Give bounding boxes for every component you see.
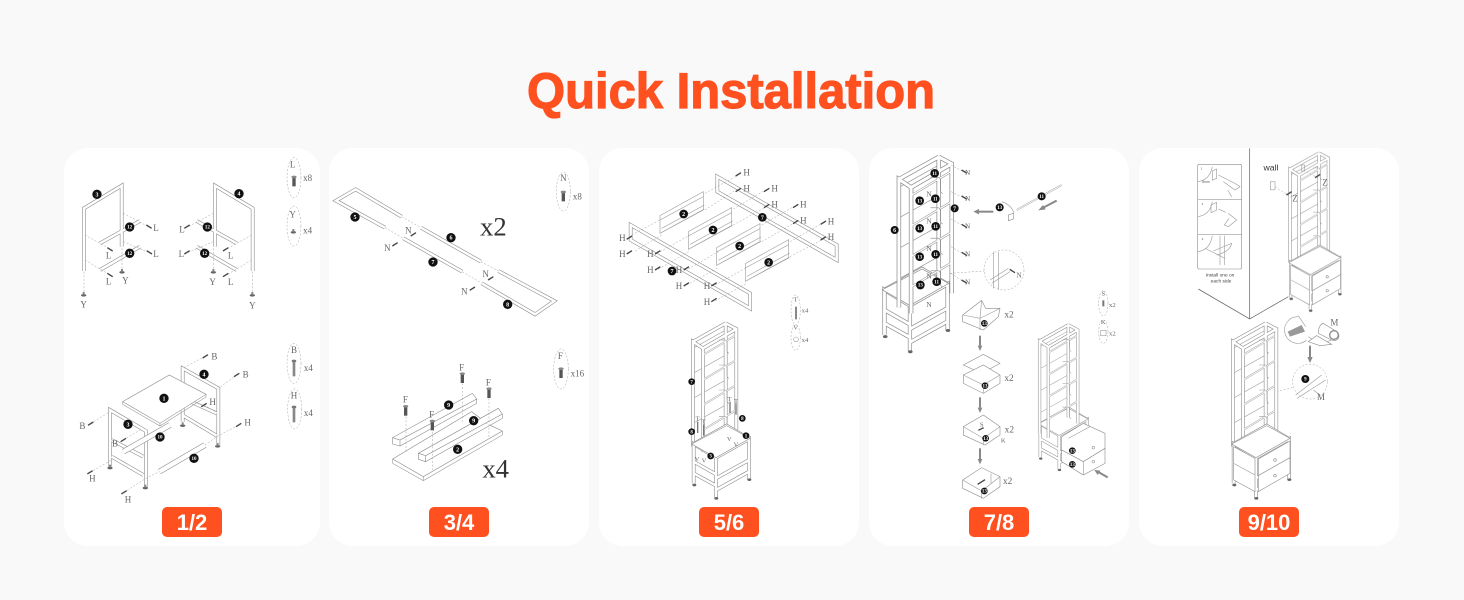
hardware ovals: S K	[1099, 291, 1116, 343]
diagram: side frames with rails and feet: L	[106, 276, 111, 286]
diagram: fabric box folding steps	[963, 300, 1014, 498]
diagram: tower fixed to wall	[1270, 153, 1342, 312]
hardware ovals: T V: V	[793, 324, 798, 331]
diagram: fabric box folding steps: x2	[1003, 477, 1013, 487]
diagram: tower with fabric bins and side rods: 11	[933, 253, 939, 258]
hardware ovals: T V	[791, 295, 809, 350]
diagram: tower with fabric bins and side rods: 13	[918, 284, 923, 289]
diagram: fabric box folding steps: x2	[1004, 310, 1014, 320]
diagram: finished tower with drawers sliding in: 13	[1070, 463, 1075, 468]
diagram: table base assembly: 10	[158, 436, 163, 441]
diagram: tower on base: 8	[741, 417, 744, 422]
diagram: fabric box folding steps: K	[1001, 437, 1006, 444]
hardware ovals: T V: x4	[802, 308, 809, 315]
instruction box: wall anchor steps: Install one on	[1206, 273, 1235, 279]
hardware ovals: L Y B H: x4	[303, 225, 313, 235]
hardware ovals: T V: x4	[802, 337, 809, 344]
diagram: long frame x2: x2	[480, 211, 507, 241]
diagram: anti-tip strap roll and detail: M	[1330, 317, 1338, 327]
diagram: tower with fabric bins and side rods: N	[965, 250, 971, 259]
step badge: 3/4	[444, 510, 475, 535]
diagram: side frames with rails and feet: L	[153, 249, 159, 259]
diagram: tower with fabric bins and side rods: 11	[932, 172, 938, 177]
hardware ovals: L Y B H: x8	[303, 173, 313, 183]
diagram: tower on base: 7	[690, 380, 693, 385]
diagram: tower with fabric bins and side rods: 6	[893, 228, 896, 234]
diagram: tower on base	[688, 323, 751, 500]
diagram: shelf board with battens x4: F	[429, 410, 434, 420]
diagram: side frames with rails and feet: L	[228, 250, 233, 260]
diagram: fabric box folding steps: 13	[983, 384, 988, 389]
diagram: long frame x2: 5	[353, 215, 356, 221]
diagram: long frame x2: N	[482, 269, 489, 279]
diagram: shelf board with battens x4: F	[459, 362, 464, 372]
diagram: shelf board with battens x4	[393, 362, 509, 483]
diagram: tower on base: T	[702, 419, 706, 426]
diagram: side frames with rails and feet: L	[153, 223, 159, 233]
diagram: tower with fabric bins and side rods: N	[965, 194, 971, 203]
panel background	[64, 148, 320, 546]
detail: rod, corner piece and arrows: 11	[1039, 195, 1045, 200]
diagram: anti-tip strap roll and detail: 9	[1304, 378, 1307, 383]
diagram: shelf board with battens x4: x4	[482, 453, 509, 483]
diagram: side frames with rails and feet: 4	[237, 192, 240, 198]
diagram: side frames with rails and feet: 12	[205, 226, 210, 231]
hardware ovals: L Y B H	[287, 158, 313, 429]
diagram: side frames with rails and feet: L	[179, 224, 185, 234]
diagram: table base assembly: 4	[202, 372, 205, 378]
diagram: tower with fabric bins and side rods: N	[926, 217, 932, 226]
diagram: long frame x2: N	[461, 286, 468, 296]
diagram: fabric box folding steps: 13	[982, 322, 987, 327]
hardware ovals: L Y B H: x4	[304, 363, 313, 373]
hardware ovals: L Y B H: H	[291, 390, 298, 400]
diagram: anti-tip strap roll and detail: M	[1317, 392, 1325, 402]
diagram: wall corner: wall	[1263, 163, 1279, 173]
hardware ovals: N F: x8	[573, 191, 582, 201]
diagram: frames with four shelf boards: H	[619, 233, 626, 243]
diagram: frames with four shelf boards: 2	[682, 212, 685, 218]
diagram: anti-tip strap roll and detail	[1277, 316, 1339, 402]
diagram: tower with fabric bins and side rods: N	[926, 190, 932, 199]
diagram: frames with four shelf boards: 2	[738, 244, 741, 250]
step badge	[162, 507, 222, 537]
diagram: tower on base: 1	[745, 434, 748, 439]
diagram: long frame x2: N	[384, 243, 391, 253]
diagram: finished tower with drawers sliding in	[1038, 325, 1108, 477]
diagram: table base assembly: 3	[126, 422, 129, 428]
diagram: tower with fabric bins and side rods: 13	[917, 255, 923, 260]
instruction box: wall anchor steps: 3	[1202, 237, 1204, 241]
diagram: table base assembly: H	[209, 397, 216, 407]
diagram: tower with fabric bins and side rods: N	[965, 277, 971, 286]
diagram: frames with four shelf boards: H	[771, 200, 778, 210]
diagram: tower with fabric bins and side rods: 13	[917, 199, 923, 204]
hardware ovals: S K: x2	[1109, 302, 1116, 309]
panel: step 3/4	[329, 148, 589, 546]
diagram: frames with four shelf boards	[619, 168, 837, 308]
diagram: long frame x2: 7	[431, 260, 434, 266]
diagram: tower with fabric bins and side rods: 11	[933, 225, 939, 230]
panel background	[599, 148, 859, 546]
step badge: 1/2	[177, 510, 207, 535]
diagram: frames with four shelf boards: 2	[767, 260, 770, 266]
diagram: frames with four shelf boards: H	[771, 184, 778, 194]
step badge	[699, 507, 759, 537]
diagram: frames with four shelf boards: H	[800, 216, 807, 226]
diagram: side frames with rails and feet: 12	[127, 252, 133, 257]
diagram: frames with four shelf boards: H	[828, 232, 835, 242]
diagram: tower on base: 3	[709, 455, 712, 460]
diagram: tower with fabric bins and side rods: N	[926, 272, 932, 281]
hardware ovals: S K: S	[1101, 291, 1105, 298]
diagram: table base assembly	[79, 352, 251, 505]
diagram: side frames with rails and feet: L	[179, 249, 184, 259]
diagram: frames with four shelf boards: H	[704, 281, 711, 291]
panel background	[1139, 148, 1399, 546]
panel: step 7/8	[869, 148, 1129, 546]
diagram: tower with fabric bins and side rods: 7	[953, 206, 956, 212]
step badge	[969, 507, 1029, 537]
diagram: finished tower with drawers sliding in: 13	[1070, 449, 1075, 454]
diagram: tower with fabric bins and side rods: N	[926, 244, 932, 253]
hardware ovals: N F: x16	[571, 369, 585, 379]
diagram: frames with four shelf boards: 2	[711, 228, 714, 234]
diagram: side frames with rails and feet: L	[106, 250, 111, 260]
diagram: side frames with rails and feet: L	[228, 277, 233, 287]
diagram: shelf board with battens x4: 9	[472, 419, 475, 425]
diagram: frames with four shelf boards: H	[676, 265, 683, 275]
panel background	[329, 148, 589, 546]
diagram: frames with four shelf boards: H	[647, 265, 654, 275]
diagram: finished unit	[1232, 323, 1291, 500]
diagram: tower on base: V	[695, 456, 700, 463]
instruction box: wall anchor steps: 1	[1201, 167, 1203, 171]
panel background	[869, 148, 1129, 546]
diagram: fabric box folding steps: x2	[1004, 374, 1014, 384]
hardware ovals: L Y B H: Y	[289, 209, 296, 219]
title: Quick Installation	[527, 63, 935, 119]
diagram: shelf board with battens x4: 9	[447, 403, 450, 409]
hardware ovals: L Y B H: x4	[304, 408, 313, 418]
diagram: tower on base: T	[696, 415, 700, 422]
diagram: frames with four shelf boards: H	[800, 200, 807, 210]
detail: rod, corner piece and arrows: 13	[997, 206, 1003, 211]
diagram: side frames with rails and feet	[80, 186, 256, 310]
diagram: tower with fabric bins and side rods: N	[926, 300, 932, 309]
diagram: frames with four shelf boards: H	[619, 249, 626, 259]
step badge: 9/10	[1248, 510, 1290, 535]
instruction box: wall anchor steps: 8mm	[1202, 180, 1210, 184]
panel: step 5/6	[599, 148, 859, 546]
hardware ovals: S K: K	[1101, 319, 1106, 326]
diagram: long frame x2: 8	[506, 302, 509, 308]
diagram: tower on base: 8	[690, 430, 693, 435]
diagram: side frames with rails and feet: Y	[209, 277, 216, 287]
step badge	[1239, 507, 1299, 537]
diagram: table base assembly: H	[89, 474, 96, 484]
diagram: side frames with rails and feet: 12	[127, 226, 133, 231]
diagram: frames with four shelf boards: H	[743, 168, 750, 178]
diagram: side frames with rails and feet: Y	[80, 300, 87, 310]
diagram: long frame x2: 6	[449, 236, 452, 242]
hardware ovals: N F	[554, 172, 585, 389]
diagram: table base assembly: B	[112, 439, 118, 449]
hardware ovals: N F: F	[558, 351, 563, 361]
diagram: long frame x2	[336, 189, 554, 314]
diagram: table base assembly: H	[125, 495, 132, 505]
hardware ovals: L Y B H: L	[290, 160, 295, 170]
diagram: table base assembly: B	[79, 421, 85, 431]
diagram: tower with fabric bins and side rods: N	[965, 168, 971, 177]
diagram: shelf board with battens x4: F	[403, 394, 408, 404]
diagram: frames with four shelf boards: 7	[670, 269, 673, 275]
hardware ovals: L Y B H: B	[291, 345, 297, 355]
diagram: side frames with rails and feet: 12	[202, 252, 208, 257]
diagram: table base assembly: 1	[162, 396, 165, 402]
instruction box: wall anchor steps	[1198, 164, 1242, 285]
diagram: frames with four shelf boards: H	[828, 216, 835, 226]
step badge	[429, 507, 489, 537]
diagram: side frames with rails and feet: Y	[122, 276, 129, 286]
detail: magnifier circle	[950, 250, 1024, 290]
diagram: table base assembly: B	[243, 370, 249, 380]
diagram: tower with fabric bins and side rods: N	[965, 222, 971, 231]
diagram: tower on base: T	[734, 398, 738, 405]
hardware ovals: T V: T	[794, 297, 798, 304]
panel: step 9/10	[1139, 148, 1399, 546]
panel: step 1/2	[64, 148, 320, 546]
diagram: table base assembly: 10	[192, 457, 197, 462]
diagram: tower with fabric bins and side rods: 11	[934, 280, 940, 285]
diagram: frames with four shelf boards: 7	[761, 215, 764, 221]
diagram: tower with fabric bins and side rods	[882, 157, 971, 353]
diagram: frames with four shelf boards: H	[743, 184, 750, 194]
diagram: fabric box folding steps: 13	[983, 437, 989, 442]
hardware ovals: S K: x2	[1109, 330, 1116, 337]
diagram: fabric box folding steps: 13	[982, 490, 987, 495]
step badge: 7/8	[984, 510, 1014, 535]
diagram: tower on base: V	[702, 457, 707, 464]
hardware ovals: N F: N	[560, 173, 567, 183]
diagram: frames with four shelf boards: H	[676, 281, 683, 291]
diagram: tower on base: T	[728, 396, 732, 403]
diagram: tower on base: V	[734, 442, 739, 449]
diagram: tower fixed to wall: Z	[1322, 178, 1328, 188]
diagram: frames with four shelf boards: H	[704, 297, 711, 307]
diagram: side frames with rails and feet: 3	[95, 192, 98, 198]
step badge: 5/6	[714, 510, 744, 535]
diagram: table base assembly: H	[244, 418, 251, 428]
diagram: frames with four shelf boards: H	[647, 249, 654, 259]
detail: magnifier circle: N	[1016, 271, 1022, 280]
detail: rod, corner piece and arrows	[973, 185, 1062, 221]
diagram: long frame x2: N	[405, 225, 412, 235]
diagram: fabric box folding steps: x2	[1005, 425, 1014, 435]
diagram: tower with fabric bins and side rods: 11	[933, 197, 938, 202]
instruction box: wall anchor steps: 2	[1202, 202, 1204, 206]
diagram: tower on base: V	[727, 436, 732, 443]
diagram: wall corner	[1198, 148, 1288, 319]
diagram: table base assembly: B	[211, 352, 217, 362]
diagram: fabric box folding steps: S	[980, 422, 984, 429]
diagram: shelf board with battens x4: 2	[456, 447, 459, 453]
diagram: tower fixed to wall: Z	[1292, 194, 1298, 204]
diagram: side frames with rails and feet: Y	[249, 300, 256, 310]
diagram: tower with fabric bins and side rods: 13	[917, 227, 923, 232]
diagram: shelf board with battens x4: F	[486, 378, 491, 388]
instruction box: wall anchor steps: each side	[1211, 279, 1232, 285]
